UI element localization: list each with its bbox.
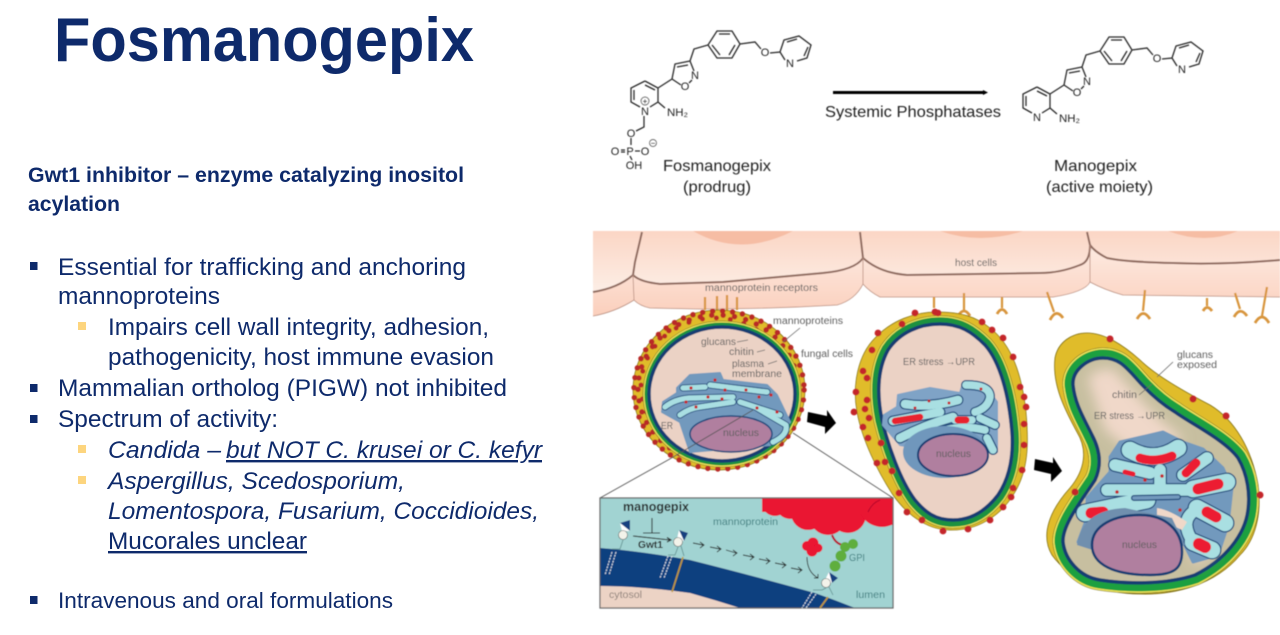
molecule: fosmanogepix: O <box>681 81 690 93</box>
cell 3 labels <box>1094 350 1217 551</box>
label: host cells: host cells <box>955 258 997 269</box>
bullet: formulations: Intravenous and oral formulations <box>58 588 393 613</box>
arrow: cell 1 to cell 2 <box>807 410 836 434</box>
molecule: fosmanogepix: + <box>643 97 648 106</box>
chemical conversion diagram <box>611 31 1203 196</box>
molecule: manogepix: N <box>1178 64 1186 76</box>
arrow: systemic phosphatases: Systemic Phosphatases <box>825 104 1001 121</box>
sub-bullet: cell wall: pathogenicity, host immune evasion <box>108 344 494 371</box>
ER cargo <box>1140 456 1172 460</box>
sub-bullet: cell wall: Impairs cell wall integrity, adhesion, <box>108 314 489 341</box>
label: manogepix active moiety <box>1046 158 1153 196</box>
endoplasmic reticulum <box>1078 432 1232 562</box>
molecule: fosmanogepix: P <box>626 146 634 158</box>
molecule: manogepix: N <box>1033 112 1041 124</box>
sub-bullet: candida: Candida – <box>108 437 222 464</box>
manogepix inhibition of Gwt1: Gwt1 <box>638 540 663 551</box>
sub-bullet: cell wall <box>78 314 494 371</box>
bullet: trafficking: Essential for trafficking and anchoring <box>58 254 466 281</box>
molecule: fosmanogepix: O <box>611 146 620 158</box>
cell 1 labels: nucleus <box>723 428 759 439</box>
lipid anchors <box>605 520 838 608</box>
nucleus <box>1092 515 1182 575</box>
arrow: systemic phosphatases <box>825 90 1001 121</box>
molecule: fosmanogepix: N <box>786 58 794 70</box>
fungal cell 3 <box>1047 333 1260 594</box>
cell 1 labels: chitin <box>729 347 754 358</box>
molecule: fosmanogepix: O <box>641 146 650 158</box>
text block: left column <box>28 164 543 613</box>
fungal cell 1 <box>633 310 853 470</box>
molecule: manogepix: O <box>1073 87 1082 99</box>
bullet: spectrum: Spectrum of activity: <box>58 406 278 433</box>
molecule: fosmanogepix: OH <box>626 160 642 172</box>
cell 1 labels: fungal cells <box>801 349 853 360</box>
mannoprotein <box>762 498 894 536</box>
cell 2 labels: ER stress →UPR <box>903 357 975 368</box>
molecule: fosmanogepix: N <box>691 70 699 82</box>
sub-bullet: candida <box>78 437 543 464</box>
nucleus <box>918 434 988 476</box>
cell 1 labels <box>661 316 853 439</box>
inset labels <box>609 517 885 601</box>
inset labels: GPI <box>849 553 865 564</box>
surface mannoproteins <box>634 311 804 469</box>
surface mannoproteins <box>854 312 1026 531</box>
molecule: manogepix <box>1023 37 1203 125</box>
surface mannoproteins <box>1075 339 1260 495</box>
inset labels: lumen <box>856 590 885 601</box>
cell 3 labels: glucans <box>1177 350 1213 361</box>
label: mannoprotein receptors: mannoprotein receptors <box>705 283 818 294</box>
subheading <box>28 164 464 216</box>
endoplasmic reticulum <box>662 373 790 452</box>
cell 3 labels: exposed <box>1177 360 1217 371</box>
bullet: ortholog: Mammalian ortholog (PIGW) not inhibited <box>58 375 507 402</box>
panel: host cells <box>593 231 1280 316</box>
membrane <box>600 548 855 608</box>
bullet: trafficking: mannoproteins <box>58 283 220 310</box>
label: manogepix active moiety: (active moiety) <box>1046 179 1153 196</box>
title: Fosmanogepix <box>54 6 474 75</box>
molecule: fosmanogepix: − <box>651 139 656 148</box>
molecule: fosmanogepix: NH₂ <box>667 107 688 119</box>
molecule: fosmanogepix: O <box>627 128 636 140</box>
nucleus <box>690 416 772 452</box>
molecule: fosmanogepix: N <box>641 106 649 118</box>
label: fosmanogepix prodrug <box>663 158 771 196</box>
cell 1 labels: membrane <box>732 369 782 380</box>
sub-bullet: candida: but NOT C. krusei or C. kefyr <box>226 437 543 464</box>
cell 1 labels: glucans <box>701 337 736 348</box>
endoplasmic reticulum <box>883 383 997 452</box>
molecule: manogepix: N <box>1083 76 1091 88</box>
molecule: fosmanogepix <box>611 31 811 172</box>
sub-bullet: moulds: Aspergillus, Scedosporium, <box>106 468 405 495</box>
sub-bullet: moulds: Mucorales unclear <box>108 528 307 555</box>
GPI anchor <box>830 535 858 572</box>
cell 1 labels: mannoproteins <box>773 316 843 327</box>
transport arrows <box>693 542 818 578</box>
cell 1 labels: ER <box>661 421 673 432</box>
cytosol <box>600 586 740 608</box>
arrow: cell 2 to cell 3 <box>1034 457 1062 482</box>
sub-bullet: moulds <box>78 468 539 555</box>
molecule: manogepix: NH₂ <box>1059 113 1080 125</box>
illustration: fungal cells and host cells <box>593 231 1280 608</box>
molecule: fosmanogepix: O <box>761 47 770 59</box>
inset labels: mannoprotein <box>713 517 778 528</box>
cell 1 labels: plasma <box>732 359 764 370</box>
inset: GPI anchoring <box>598 496 894 610</box>
small protein <box>802 538 822 556</box>
subheading: Gwt1 inhibitor – enzyme catalyzing inositol <box>28 164 464 187</box>
label: fosmanogepix prodrug: Fosmanogepix <box>663 158 771 175</box>
subheading: acylation <box>28 193 120 216</box>
fungal cell 2 <box>854 312 1027 531</box>
label: fosmanogepix prodrug: (prodrug) <box>683 179 751 196</box>
manogepix inhibition of Gwt1: manogepix <box>623 499 690 514</box>
label: manogepix active moiety: Manogepix <box>1054 158 1137 175</box>
cell 3 labels: ER stress →UPR <box>1094 411 1165 422</box>
bullet: trafficking <box>30 254 466 310</box>
cell 3 labels: nucleus <box>1122 540 1157 551</box>
receptors on host cells <box>705 287 1269 323</box>
molecule: manogepix: O <box>1153 53 1162 65</box>
manogepix inhibition of Gwt1 <box>623 499 690 551</box>
callout lines from cell 1 to inset <box>600 410 893 498</box>
inset labels: cytosol <box>609 590 642 601</box>
label: nucleus cell 2: nucleus <box>936 449 971 460</box>
sub-bullet: moulds: Lomentospora, Fusarium, Coccidioides, <box>108 498 539 525</box>
cell 3 labels: chitin <box>1112 390 1137 401</box>
